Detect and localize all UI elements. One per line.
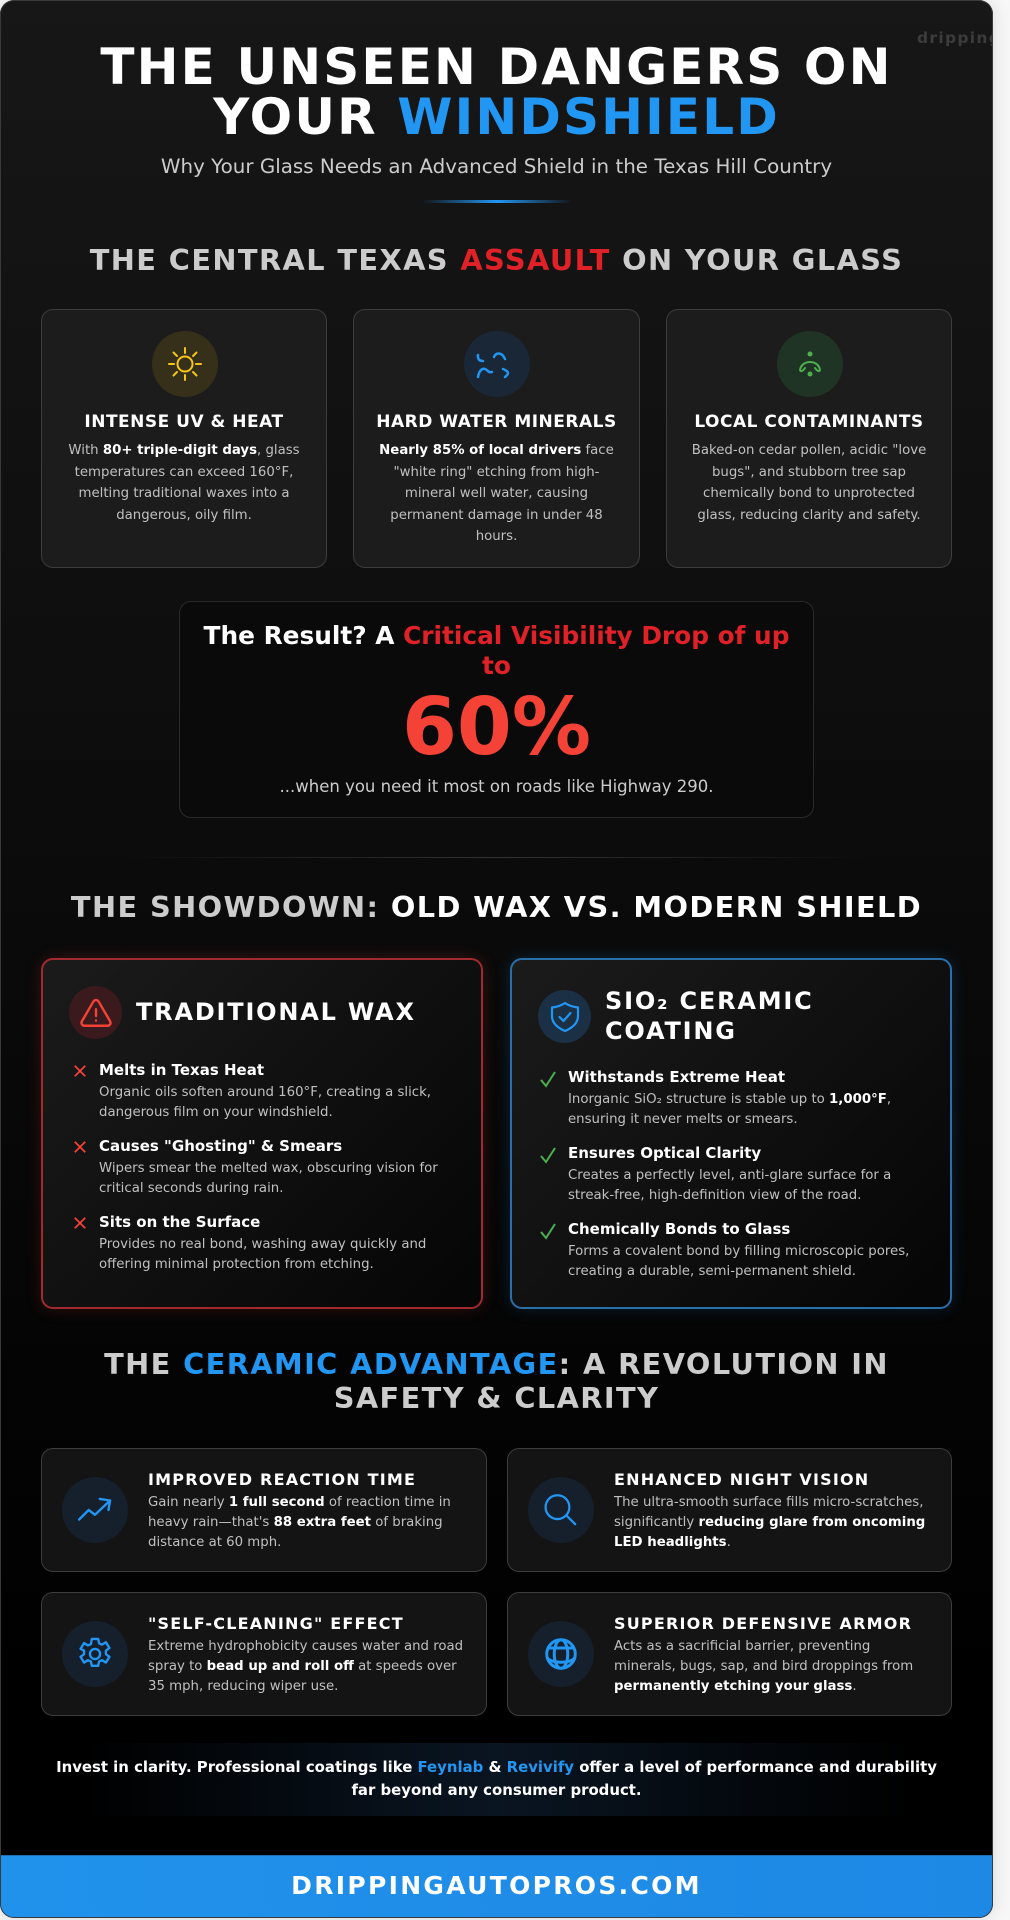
item text [99, 1084, 431, 1120]
card text: bugs", and stubborn tree sap [712, 464, 906, 480]
card text [148, 1495, 451, 1550]
panel: local contaminants card [666, 309, 952, 568]
card text: temperatures can exceed 160°F, [75, 464, 293, 480]
card text: distance at 60 mph. [148, 1535, 281, 1550]
card text: glass, reducing clarity and safety. [697, 508, 921, 522]
card text: hours. [476, 529, 517, 544]
card text: "white ring" etching from high- [394, 464, 600, 480]
item text: offering minimal protection from etching. [99, 1256, 374, 1272]
item text [568, 1092, 891, 1126]
title [100, 38, 893, 146]
card text: Gain nearly 1 full second of reaction time in [148, 1495, 451, 1510]
item title: Withstands Extreme Heat [568, 1068, 785, 1086]
card text: permanent damage in under 48 [390, 508, 603, 522]
card title: ENHANCED NIGHT VISION [614, 1470, 869, 1489]
panel title: TRADITIONAL WAX [136, 998, 416, 1026]
title underline glow [422, 200, 572, 203]
item text [99, 1236, 426, 1272]
icon: warning [69, 986, 122, 1039]
card title: LOCAL CONTAMINANTS [694, 412, 924, 432]
item text: Wipers smear the melted wax, obscuring vision for [99, 1160, 438, 1176]
item text: critical seconds during rain. [99, 1180, 283, 1196]
list item 3 [74, 1213, 426, 1272]
card text: chemically bond to unprotected [703, 486, 915, 501]
card text [614, 1495, 925, 1550]
panel: self-cleaning effect [41, 1592, 487, 1716]
list item 1 [74, 1061, 431, 1120]
panel: hard water minerals card [353, 309, 640, 568]
icon: check [540, 1072, 556, 1088]
card title: IMPROVED REACTION TIME [148, 1470, 416, 1489]
panel title [605, 987, 814, 1044]
card title: HARD WATER MINERALS [376, 412, 617, 432]
card text: spray to bead up and roll off at speeds over [148, 1659, 457, 1674]
item text: Inorganic SiO₂ structure is stable up to 1,000°F, [568, 1092, 891, 1106]
card text: heavy rain—that's 88 extra feet of braking [148, 1515, 443, 1530]
item text: Organic oils soften around 160°F, creating a slick, [99, 1084, 431, 1100]
card text: mineral well water, causing [405, 486, 588, 501]
footer website band: DRIPPINGAUTOPROS.COM [291, 1871, 702, 1900]
icon: check [540, 1148, 556, 1164]
item text: Forms a covalent bond by filling microscopic pores, [568, 1244, 909, 1258]
callout caption: ...when you need it most on roads like Highway 290. [280, 777, 713, 796]
icon: magnifier [528, 1477, 594, 1543]
panel title: SIO₂ CERAMIC [605, 987, 814, 1015]
item text: streak-free, high-definition view of the road. [568, 1188, 861, 1202]
item title: Causes "Ghosting" & Smears [99, 1137, 342, 1155]
card text [148, 1639, 463, 1694]
icon: gear [62, 1621, 128, 1687]
panel: improved reaction time [41, 1448, 487, 1572]
list item 2 [540, 1144, 891, 1202]
item text [568, 1168, 891, 1202]
card text: melting traditional waxes into a [78, 486, 290, 501]
card text [68, 443, 300, 522]
card text: permanently etching your glass. [614, 1679, 857, 1694]
item text [568, 1244, 909, 1278]
icon: check [540, 1224, 556, 1240]
list item 3 [540, 1220, 909, 1278]
card text [692, 443, 926, 522]
list item 2 [74, 1137, 438, 1196]
heading: ceramic advantage [104, 1347, 889, 1414]
card text: Extreme hydrophobicity causes water and road [148, 1639, 463, 1654]
panel: superior defensive armor [507, 1592, 952, 1716]
closing statement [0, 1743, 993, 1816]
heading: showdown: THE SHOWDOWN: OLD WAX VS. MODERN SHIELD [71, 890, 922, 924]
panel: SiO2 ceramic coating [510, 958, 952, 1309]
item text: ensuring it never melts or smears. [568, 1112, 798, 1126]
closing statement: Invest in clarity. Professional coatings like Feynlab & Revivify offer a level of performance and durability [56, 1758, 937, 1776]
card title: "SELF-CLEANING" EFFECT [148, 1614, 404, 1633]
card text: Baked-on cedar pollen, acidic "love [692, 443, 926, 458]
icon: cross [74, 1217, 86, 1229]
list item 1 [540, 1068, 891, 1126]
icon: trending up [62, 1477, 128, 1543]
card text: With 80+ triple-digit days, glass [68, 443, 300, 458]
title: YOUR WINDSHIELD [213, 88, 780, 146]
subtitle: Why Your Glass Needs an Advanced Shield in the Texas Hill Country [161, 155, 832, 178]
icon: globe [528, 1621, 594, 1687]
heading: ceramic advantage: SAFETY & CLARITY [334, 1380, 659, 1414]
card text: minerals, bugs, sap, and bird droppings from [614, 1659, 913, 1674]
card text: The ultra-smooth surface fills micro-scratches, [614, 1495, 923, 1510]
title: THE UNSEEN DANGERS ON [100, 38, 893, 96]
item text: Creates a perfectly level, anti-glare surface for a [568, 1168, 891, 1182]
callout: result [179, 601, 814, 818]
item title: Sits on the Surface [99, 1213, 260, 1231]
heading: assault: THE CENTRAL TEXAS ASSAULT ON YOUR GLASS [90, 243, 903, 277]
card text: Nearly 85% of local drivers face [379, 443, 614, 458]
callout heading: The Result? A Critical Visibility Drop of up [204, 621, 789, 650]
item text: creating a durable, semi-permanent shield. [568, 1264, 856, 1278]
card title: INTENSE UV & HEAT [84, 412, 284, 432]
icon: water minerals [464, 331, 530, 397]
closing statement: far beyond any consumer product. [351, 1781, 642, 1799]
icon: sun [152, 331, 218, 397]
item title: Chemically Bonds to Glass [568, 1220, 790, 1238]
icon: contaminants [777, 331, 843, 397]
card text: Acts as a sacrificial barrier, preventing [614, 1639, 870, 1654]
icon: shield [538, 990, 591, 1043]
card text: significantly reducing glare from oncoming [614, 1515, 925, 1530]
item text: dangerous film on your windshield. [99, 1104, 333, 1120]
panel: intense UV and heat card [41, 309, 327, 568]
footer website band [0, 1855, 993, 1918]
card text: LED headlights. [614, 1535, 731, 1550]
callout heading: to [482, 651, 511, 680]
card title: SUPERIOR DEFENSIVE ARMOR [614, 1614, 912, 1633]
item text [99, 1160, 438, 1196]
icon: cross [74, 1141, 86, 1153]
item title: Ensures Optical Clarity [568, 1144, 761, 1162]
item text: Provides no real bond, washing away quickly and [99, 1236, 426, 1252]
card text: dangerous, oily film. [116, 508, 252, 522]
icon: cross [74, 1065, 86, 1077]
card text [379, 443, 614, 544]
callout heading [204, 621, 789, 680]
big number: 60% [402, 681, 591, 773]
panel: enhanced night vision [507, 1448, 952, 1572]
panel: traditional wax [41, 958, 483, 1309]
card text [614, 1639, 913, 1694]
item title: Melts in Texas Heat [99, 1061, 264, 1079]
panel title: COATING [605, 1016, 737, 1044]
heading: ceramic advantage: THE CERAMIC ADVANTAGE: A REVOLUTION IN [104, 1347, 889, 1381]
card text: 35 mph, reducing wiper use. [148, 1679, 338, 1694]
